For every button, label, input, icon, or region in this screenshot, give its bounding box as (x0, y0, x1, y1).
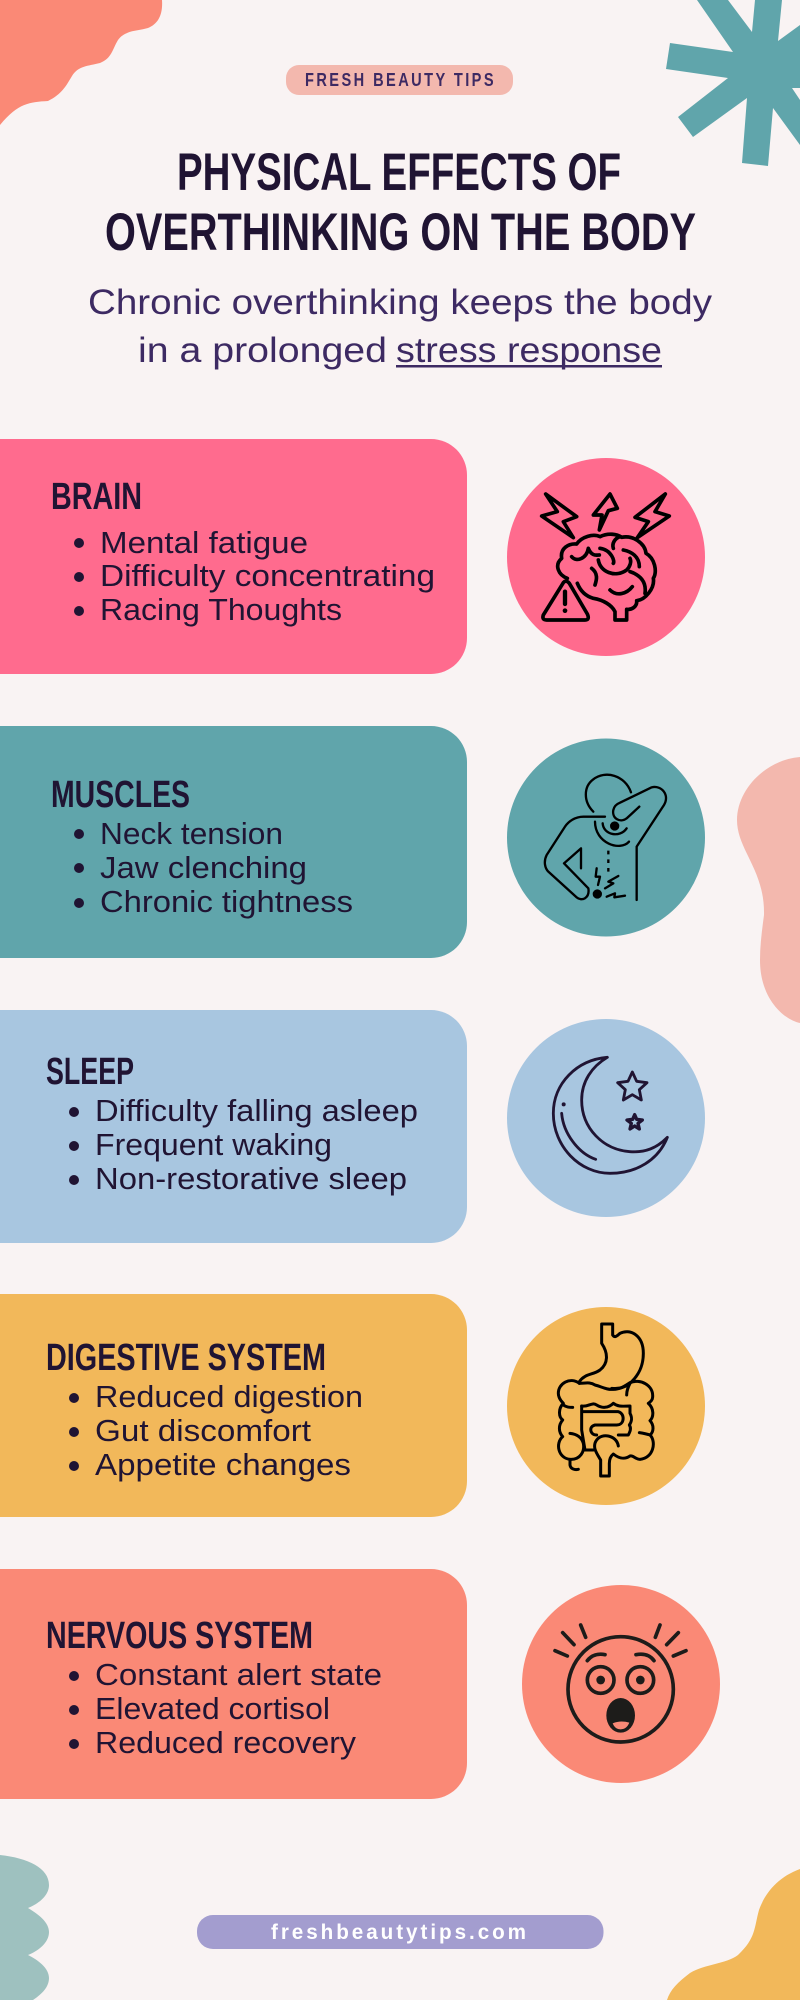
list: muscle effects: Chronic tightness (100, 885, 353, 919)
title (105, 143, 696, 262)
icon: neck and back pain (507, 738, 705, 936)
heading: sleep: SLEEP (46, 1051, 134, 1093)
list: sleep effects: Frequent waking (95, 1128, 332, 1162)
subtitle: Chronic overthinking keeps the body (88, 283, 713, 322)
list: digestive effects (69, 1380, 363, 1482)
icon: stomach and intestines (507, 1307, 705, 1505)
decorative asterisk: top-right teal (666, 0, 800, 166)
list: sleep effects (69, 1094, 418, 1196)
list: nervous system effects: Elevated cortisol (95, 1692, 330, 1726)
list: nervous system effects: Constant alert state (95, 1658, 382, 1692)
footer: website pill: freshbeautytips.com (271, 1921, 529, 1944)
title: PHYSICAL EFFECTS OF (177, 143, 621, 202)
list: muscle effects: Neck tension (100, 817, 283, 851)
list: digestive effects: Reduced digestion (95, 1380, 363, 1414)
badge: fresh beauty tips: FRESH BEAUTY TIPS (305, 70, 496, 90)
decorative blob: bottom-right yellow (667, 1869, 800, 2000)
heading: digestive system: DIGESTIVE SYSTEM (46, 1337, 326, 1379)
list: digestive effects: Appetite changes (95, 1448, 351, 1482)
list: muscle effects (74, 817, 353, 919)
heading: muscles: MUSCLES (51, 774, 190, 816)
list: brain effects: Mental fatigue (100, 526, 308, 560)
list: brain effects: Difficulty concentrating (100, 559, 435, 593)
heading: brain: BRAIN (51, 476, 142, 518)
list: nervous system effects: Reduced recovery (95, 1726, 357, 1760)
panel: nervous system (0, 1569, 467, 1799)
badge: fresh beauty tips (286, 65, 513, 95)
panel: brain (0, 439, 467, 674)
list: brain effects: Racing Thoughts (100, 593, 342, 627)
footer: website pill (197, 1915, 604, 1949)
list: nervous system effects (69, 1658, 382, 1760)
list: sleep effects: Difficulty falling asleep (95, 1094, 418, 1128)
panel: sleep (0, 1010, 467, 1243)
decorative blob: top-left coral (0, 0, 162, 125)
panel: muscles (0, 726, 467, 958)
panel: digestive system (0, 1294, 467, 1517)
subtitle: in a prolonged (138, 331, 387, 370)
subtitle (88, 283, 713, 370)
list: muscle effects: Jaw clenching (100, 851, 307, 885)
list: sleep effects: Non-restorative sleep (95, 1162, 407, 1196)
subtitle: stress response (396, 331, 662, 370)
list: digestive effects: Gut discomfort (95, 1414, 312, 1448)
decorative blob: bottom-left sage (0, 1855, 49, 2000)
decorative blob: right pink (737, 757, 800, 1023)
icon: brain with lightning and warning (507, 458, 705, 656)
heading: nervous system: NERVOUS SYSTEM (46, 1615, 313, 1657)
icon: moon and stars (507, 1019, 705, 1217)
list: brain effects (74, 526, 435, 627)
icon: shocked face (522, 1585, 720, 1783)
